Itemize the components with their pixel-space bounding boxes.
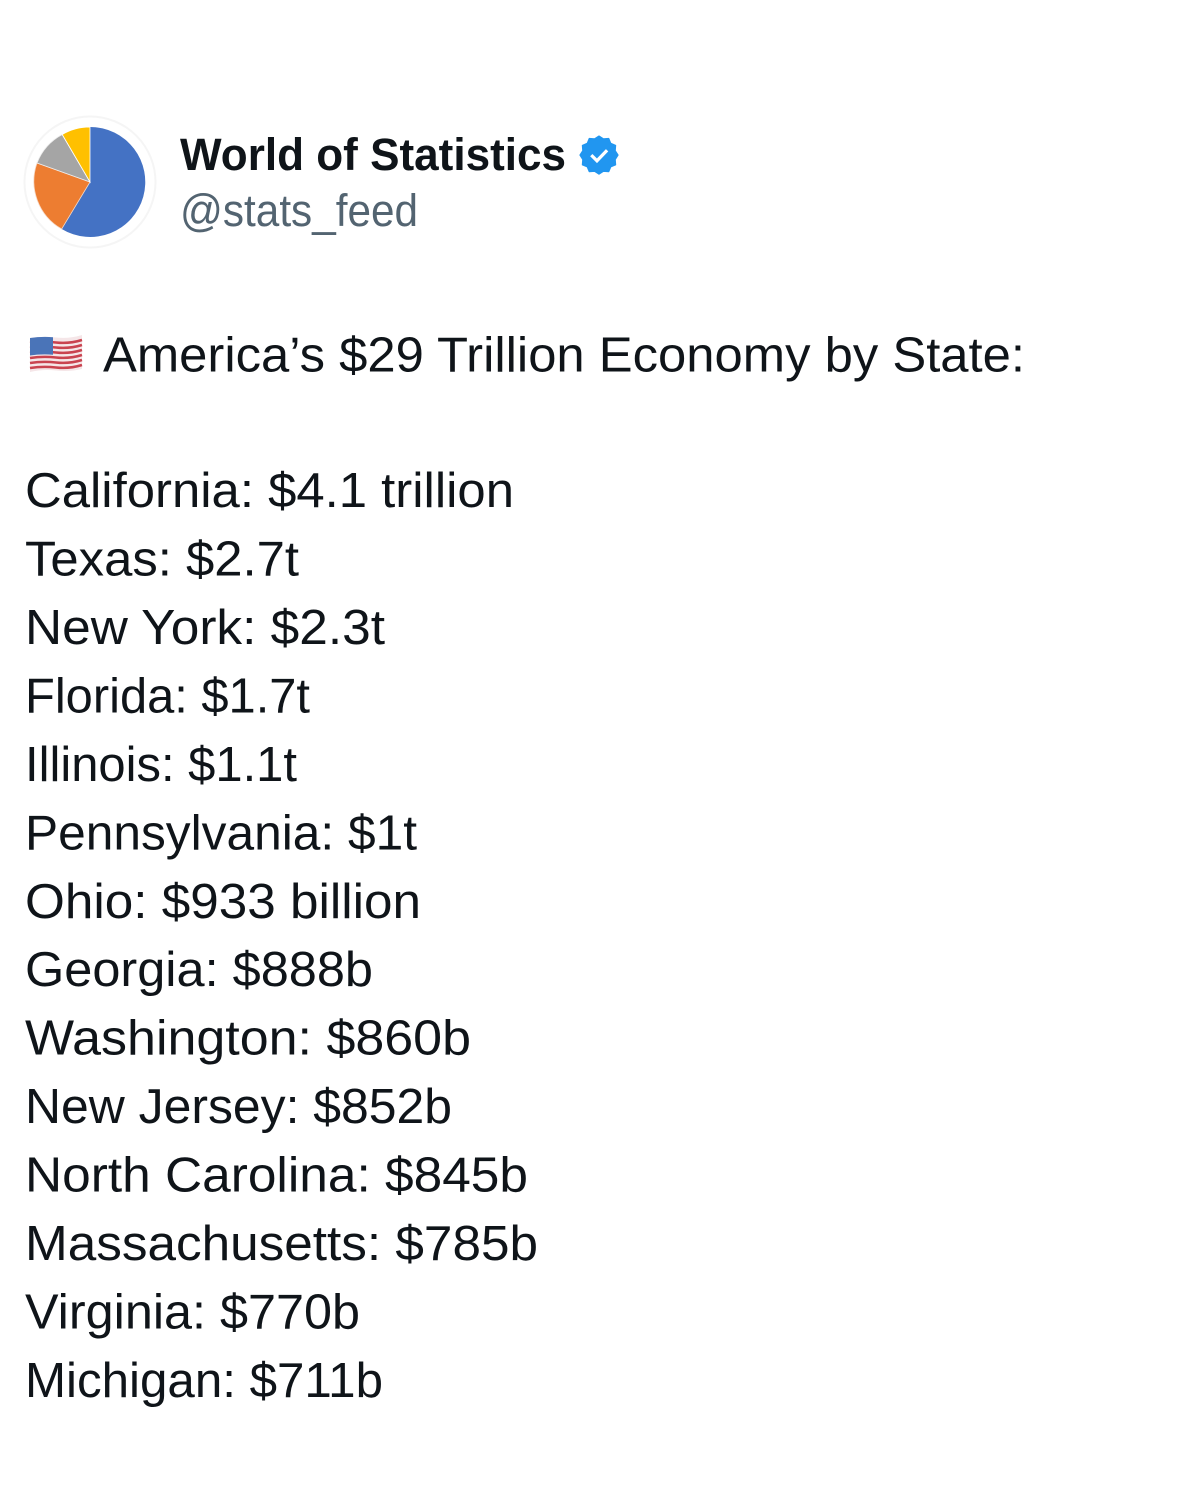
- Georgia: Georgia: $888b: [25, 943, 373, 997]
- New York: New York: $2.3t: [25, 601, 385, 655]
- icon: US flag: [30, 335, 82, 372]
- account handle: @stats_feed: [180, 185, 418, 236]
- icon: verified badge: [580, 136, 618, 174]
- Florida: Florida: $1.7t: [25, 669, 310, 723]
- Texas: Texas: $2.7t: [25, 532, 299, 586]
- Illinois: Illinois: $1.1t: [25, 738, 297, 792]
- Massachusetts: Massachusetts: $785b: [25, 1217, 538, 1271]
- Ohio: Ohio: $933 billion: [25, 875, 421, 929]
- icon: avatar pie chart: [24, 116, 156, 248]
- post heading: [30, 328, 1025, 382]
- North Carolina: North Carolina: $845b: [25, 1149, 528, 1203]
- Virginia: Virginia: $770b: [25, 1286, 360, 1340]
- list: state GDP values: [25, 464, 538, 1408]
- tweet header: [24, 116, 618, 248]
- Pennsylvania: Pennsylvania: $1t: [25, 806, 417, 860]
- Washington: Washington: $860b: [25, 1012, 471, 1066]
- California: California: $4.1 trillion: [25, 464, 514, 518]
- Michigan: Michigan: $711b: [25, 1354, 383, 1408]
- heading text: America’s $29 Trillion Economy by State:: [103, 328, 1025, 382]
- account name: World of Statistics: [180, 129, 566, 180]
- New Jersey: New Jersey: $852b: [25, 1080, 452, 1134]
